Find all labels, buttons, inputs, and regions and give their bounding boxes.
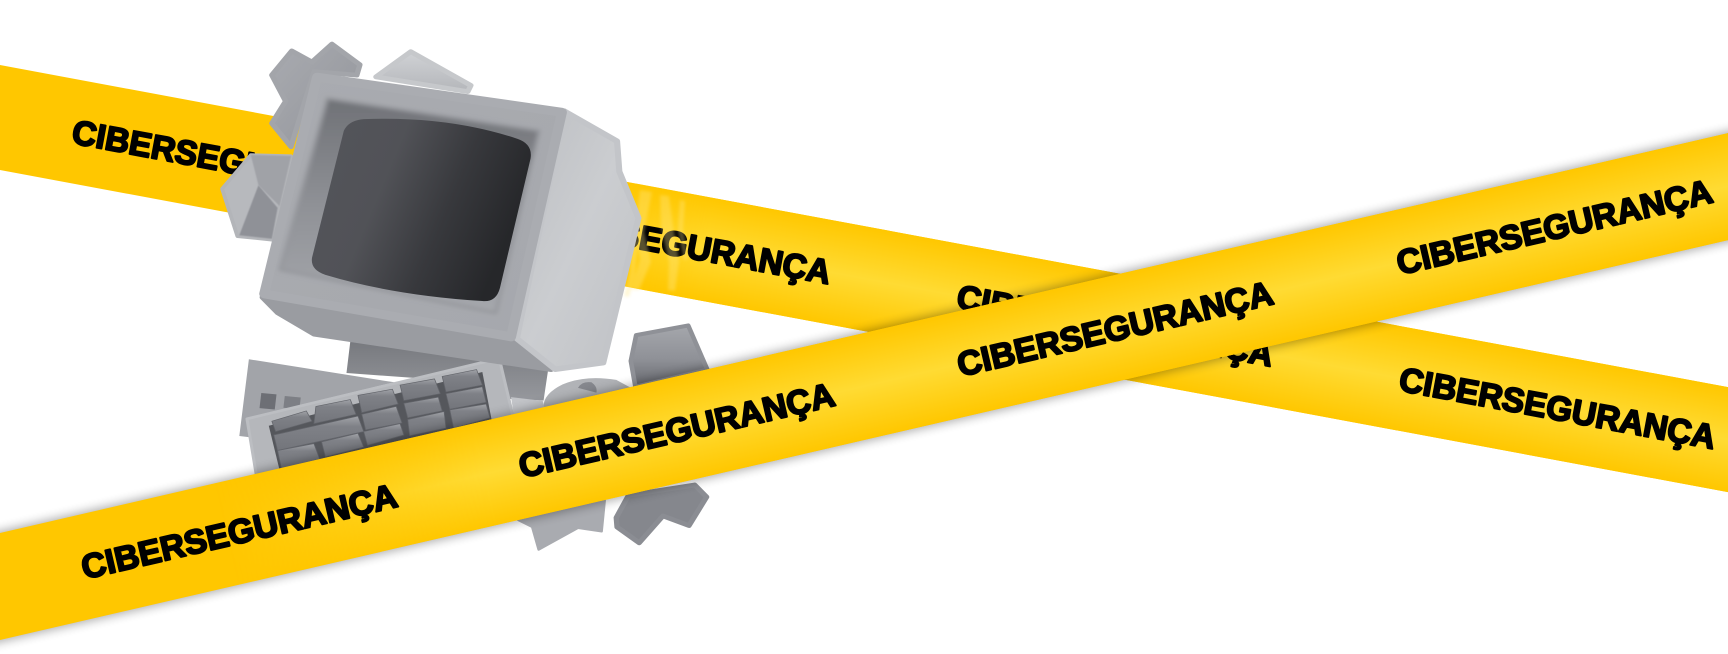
key: right upright <box>631 325 707 387</box>
tape label 1: CIBERSEGURANÇA <box>69 113 392 210</box>
keyboard: back <box>239 359 394 437</box>
tape label 1: CIBERSEGURANÇA <box>78 477 401 587</box>
key: left hexagon <box>222 155 291 240</box>
tape label 3: CIBERSEGURANÇA <box>954 278 1276 374</box>
key: top middle light <box>376 52 471 92</box>
tape label 4: CIBERSEGURANÇA <box>1396 361 1719 457</box>
monitor recess <box>280 99 539 313</box>
monitor bottom side <box>262 297 551 370</box>
monitor stand <box>346 335 548 401</box>
tape label 2: CIBERSEGURANÇA <box>511 196 834 292</box>
monitor <box>262 77 638 370</box>
monitor right side <box>517 111 638 369</box>
monitor screen <box>312 119 531 301</box>
tape label 2: CIBERSEGURANÇA <box>515 376 838 486</box>
keyboard: front <box>247 359 514 476</box>
key: bottom middle <box>517 500 605 550</box>
key: top-left cross-shaped <box>272 44 360 147</box>
worn speckle texture on tape <box>624 190 688 297</box>
mouse <box>511 378 635 414</box>
key: bottom right <box>616 485 707 543</box>
icon: retro computer with scattered keys <box>222 44 707 550</box>
tape label 3: CIBERSEGURANÇA <box>954 275 1277 384</box>
monitor front bezel <box>264 77 562 337</box>
tape label 4: CIBERSEGURANÇA <box>1393 173 1716 283</box>
tape: ascending yellow band in front <box>0 124 1728 646</box>
tape: descending yellow band behind the computer <box>0 61 1728 502</box>
tape shadow <box>0 124 1728 646</box>
